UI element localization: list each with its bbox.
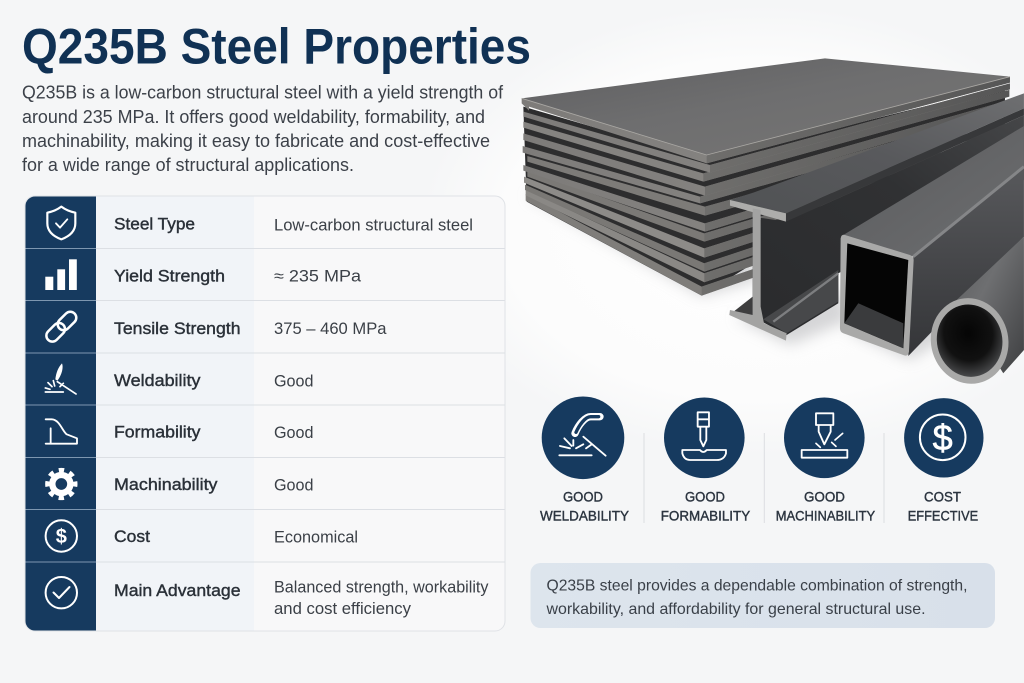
- benefit icons row: [540, 396, 984, 524]
- row: weldability: Good: [274, 373, 314, 391]
- icon: milling tool: [802, 413, 847, 458]
- icon: gear: [47, 470, 75, 498]
- icon: check circle: [46, 577, 77, 608]
- row: weldability: Weldability: [114, 371, 201, 390]
- row: yield strength: [45, 259, 362, 290]
- row: machinability: Good: [274, 477, 314, 495]
- benefit: good weldability: WELDABILITY: [540, 508, 630, 524]
- benefit: good weldability: GOOD: [563, 489, 603, 505]
- row: steel type: Steel Type: [114, 214, 195, 233]
- row: main advantage: Balanced strength, workability: [274, 579, 489, 597]
- row: main advantage: Main Advantage: [114, 581, 240, 600]
- steel products photo illustration: [522, 58, 1024, 391]
- benefit: cost effective: COST: [924, 489, 961, 505]
- benefit: good machinability: [776, 398, 876, 524]
- row: cost: Economical: [274, 529, 358, 547]
- row: tensile strength: 375 – 460 MPa: [274, 320, 387, 338]
- row: yield strength: Yield Strength: [114, 267, 225, 286]
- benefit: good machinability: GOOD: [804, 489, 845, 505]
- benefit: good weldability: [540, 396, 630, 524]
- floor shadows: [527, 180, 960, 360]
- icon: chain link: [44, 309, 79, 344]
- intro paragraph: Q235B is a low-carbon structural steel with a yield strength of: [22, 82, 504, 102]
- round pipe: [923, 237, 1024, 391]
- callout summary: [530, 563, 995, 628]
- row: tensile strength: [44, 309, 387, 344]
- intro paragraph: for a wide range of structural applications.: [22, 155, 354, 175]
- row: cost: [46, 520, 358, 552]
- callout summary: Q235B steel provides a dependable combination of strength,: [546, 578, 968, 595]
- icon: dollar coin: $: [933, 417, 953, 458]
- benefit: good machinability: MACHINABILITY: [776, 508, 876, 524]
- row: main advantage: [46, 577, 489, 618]
- icon: welding torch: [559, 417, 606, 456]
- row: machinability: [47, 470, 314, 498]
- row: cost: Cost: [114, 527, 150, 546]
- callout summary: workability, and affordability for general structural use.: [546, 601, 926, 618]
- benefit: good formability: [661, 398, 751, 524]
- row: steel type: [47, 207, 473, 239]
- row: yield strength: ≈ 235 MPa: [274, 268, 362, 286]
- row: machinability: Machinability: [114, 475, 218, 494]
- stacked steel plates: [522, 58, 1010, 296]
- row: weldability: [45, 363, 313, 394]
- icon: shield: [47, 207, 75, 239]
- row: formability: Formability: [114, 423, 201, 442]
- icon: forming die: [46, 419, 77, 444]
- intro paragraph: around 235 MPa. It offers good weldability, formability, and: [22, 107, 485, 127]
- I-beam: [729, 93, 1024, 341]
- icon: dollar coin: [46, 520, 77, 552]
- intro paragraph: machinability, making it easy to fabricate and cost-effective: [22, 131, 490, 151]
- row: tensile strength: Tensile Strength: [114, 319, 240, 338]
- square hollow tube: [840, 126, 1024, 356]
- row: main advantage: and cost efficiency: [274, 600, 412, 618]
- title: Q235B Steel Properties: [22, 18, 531, 74]
- row: steel type: Low-carbon structural steel: [274, 217, 473, 235]
- properties table: [25, 196, 505, 631]
- icon: bars: [45, 259, 77, 290]
- icon: forming press: [682, 412, 726, 460]
- benefit: cost effective: [904, 398, 984, 524]
- row: formability: [46, 419, 314, 444]
- intro paragraph: [22, 82, 504, 175]
- icon: dollar coin: $: [56, 526, 67, 548]
- benefit: good formability: GOOD: [685, 489, 725, 505]
- row: formability: Good: [274, 424, 314, 442]
- benefit: good formability: FORMABILITY: [661, 508, 751, 524]
- benefit: cost effective: EFFECTIVE: [908, 508, 978, 524]
- icon: welding torch: [45, 363, 76, 394]
